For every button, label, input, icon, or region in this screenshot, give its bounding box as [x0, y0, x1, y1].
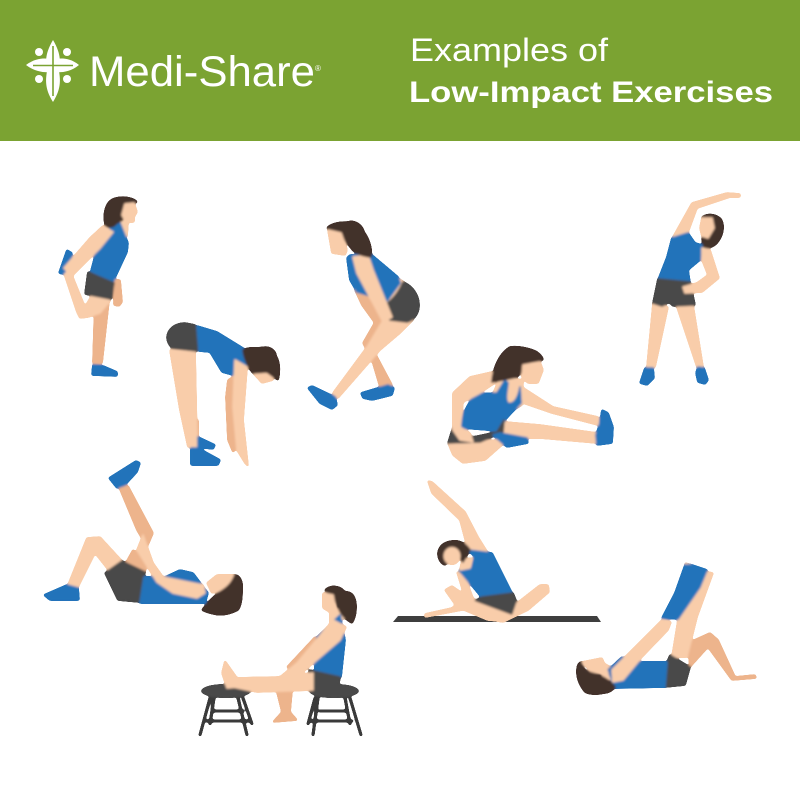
figure: standing quad stretch — [59, 197, 137, 376]
stool: right — [308, 684, 361, 735]
stool: left — [200, 684, 252, 735]
figure: seated leg stretch on stools — [200, 586, 361, 735]
registered mark: ® — [315, 64, 321, 73]
figure: lying single leg raise — [44, 461, 242, 615]
figure: lying leg raise with strap — [577, 563, 756, 694]
title line one: Examples of — [410, 32, 608, 68]
figure: seated cross-legged side bend — [425, 481, 549, 622]
title line two: Low-Impact Exercises — [409, 76, 773, 109]
figure: standing side bend — [640, 193, 740, 385]
icon: Medi-Share cross logo — [26, 40, 79, 102]
header band — [0, 0, 800, 141]
figure: standing forward bend — [167, 323, 279, 466]
figure: seated toe reach — [448, 347, 613, 463]
figure: standing lunge stretch — [308, 221, 419, 409]
exercise mat — [393, 616, 601, 622]
logo wordmark: Medi-Share — [89, 48, 315, 96]
